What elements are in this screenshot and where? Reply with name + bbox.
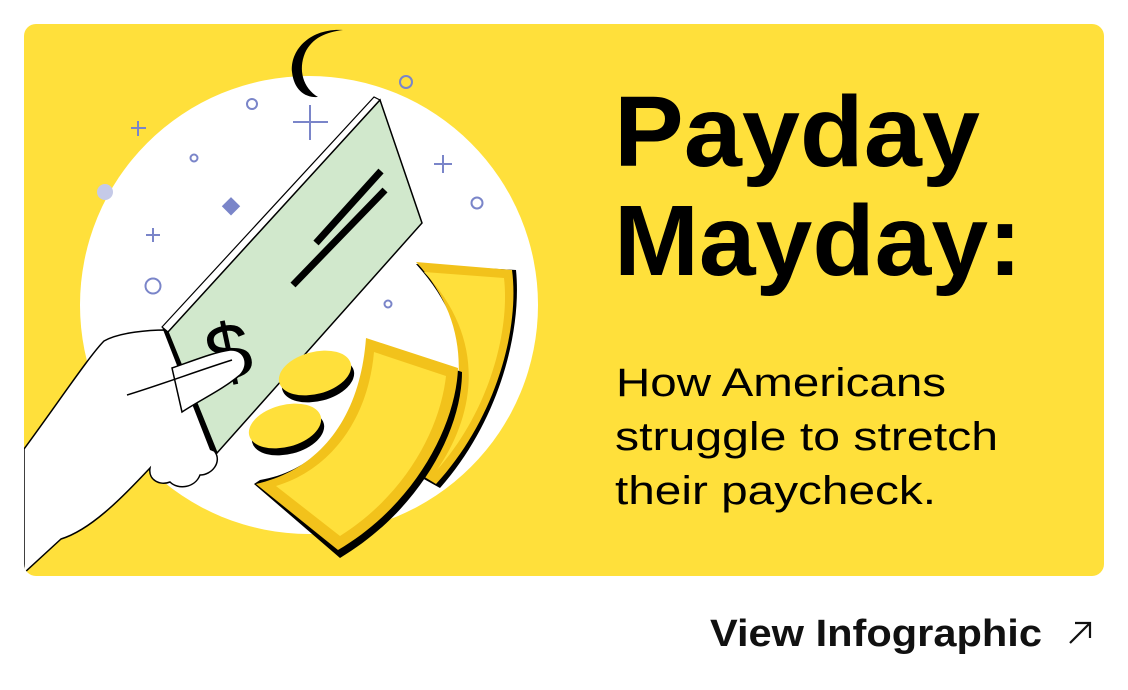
illustration: paycheck in hand bbox=[24, 30, 538, 573]
link: view infographic: View Infographic bbox=[710, 613, 1042, 655]
back bill bbox=[416, 264, 517, 488]
subtitle: How Americans bbox=[616, 361, 946, 405]
subtitle: struggle to stretch bbox=[615, 415, 998, 459]
moon shape bbox=[292, 30, 343, 97]
thumb bbox=[172, 350, 245, 412]
icon: arrow bbox=[1070, 623, 1090, 643]
card background bbox=[24, 24, 1104, 576]
check bbox=[162, 97, 380, 332]
illustration: paycheck in hand: $ bbox=[198, 304, 260, 400]
title bbox=[614, 76, 1022, 297]
hand body (behind check) bbox=[24, 330, 217, 573]
title: Mayday: bbox=[614, 185, 1022, 297]
title: Payday bbox=[614, 76, 980, 188]
coins bbox=[282, 366, 354, 402]
white circle bbox=[80, 76, 538, 534]
subtitle: their paycheck. bbox=[615, 469, 936, 513]
decorations bbox=[131, 76, 482, 308]
subtitle bbox=[615, 361, 998, 513]
front bill bbox=[254, 370, 462, 558]
